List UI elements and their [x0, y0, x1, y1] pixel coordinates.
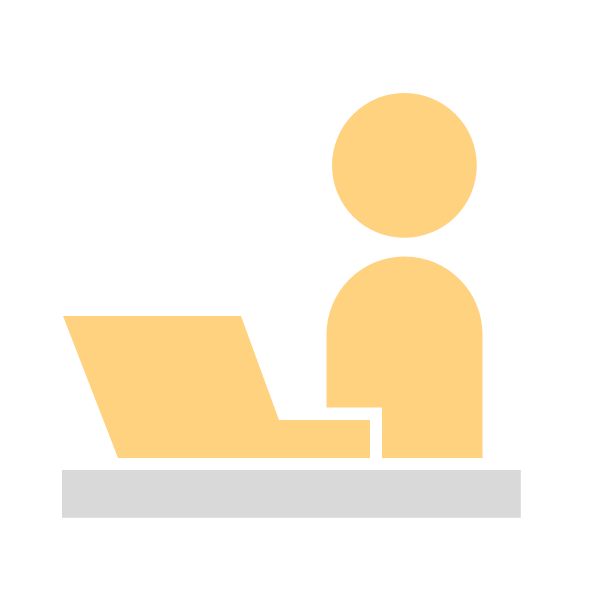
icon: person torso	[326, 256, 482, 458]
icon: person head	[332, 93, 477, 238]
desk	[62, 470, 521, 518]
icon: laptop	[63, 316, 370, 458]
